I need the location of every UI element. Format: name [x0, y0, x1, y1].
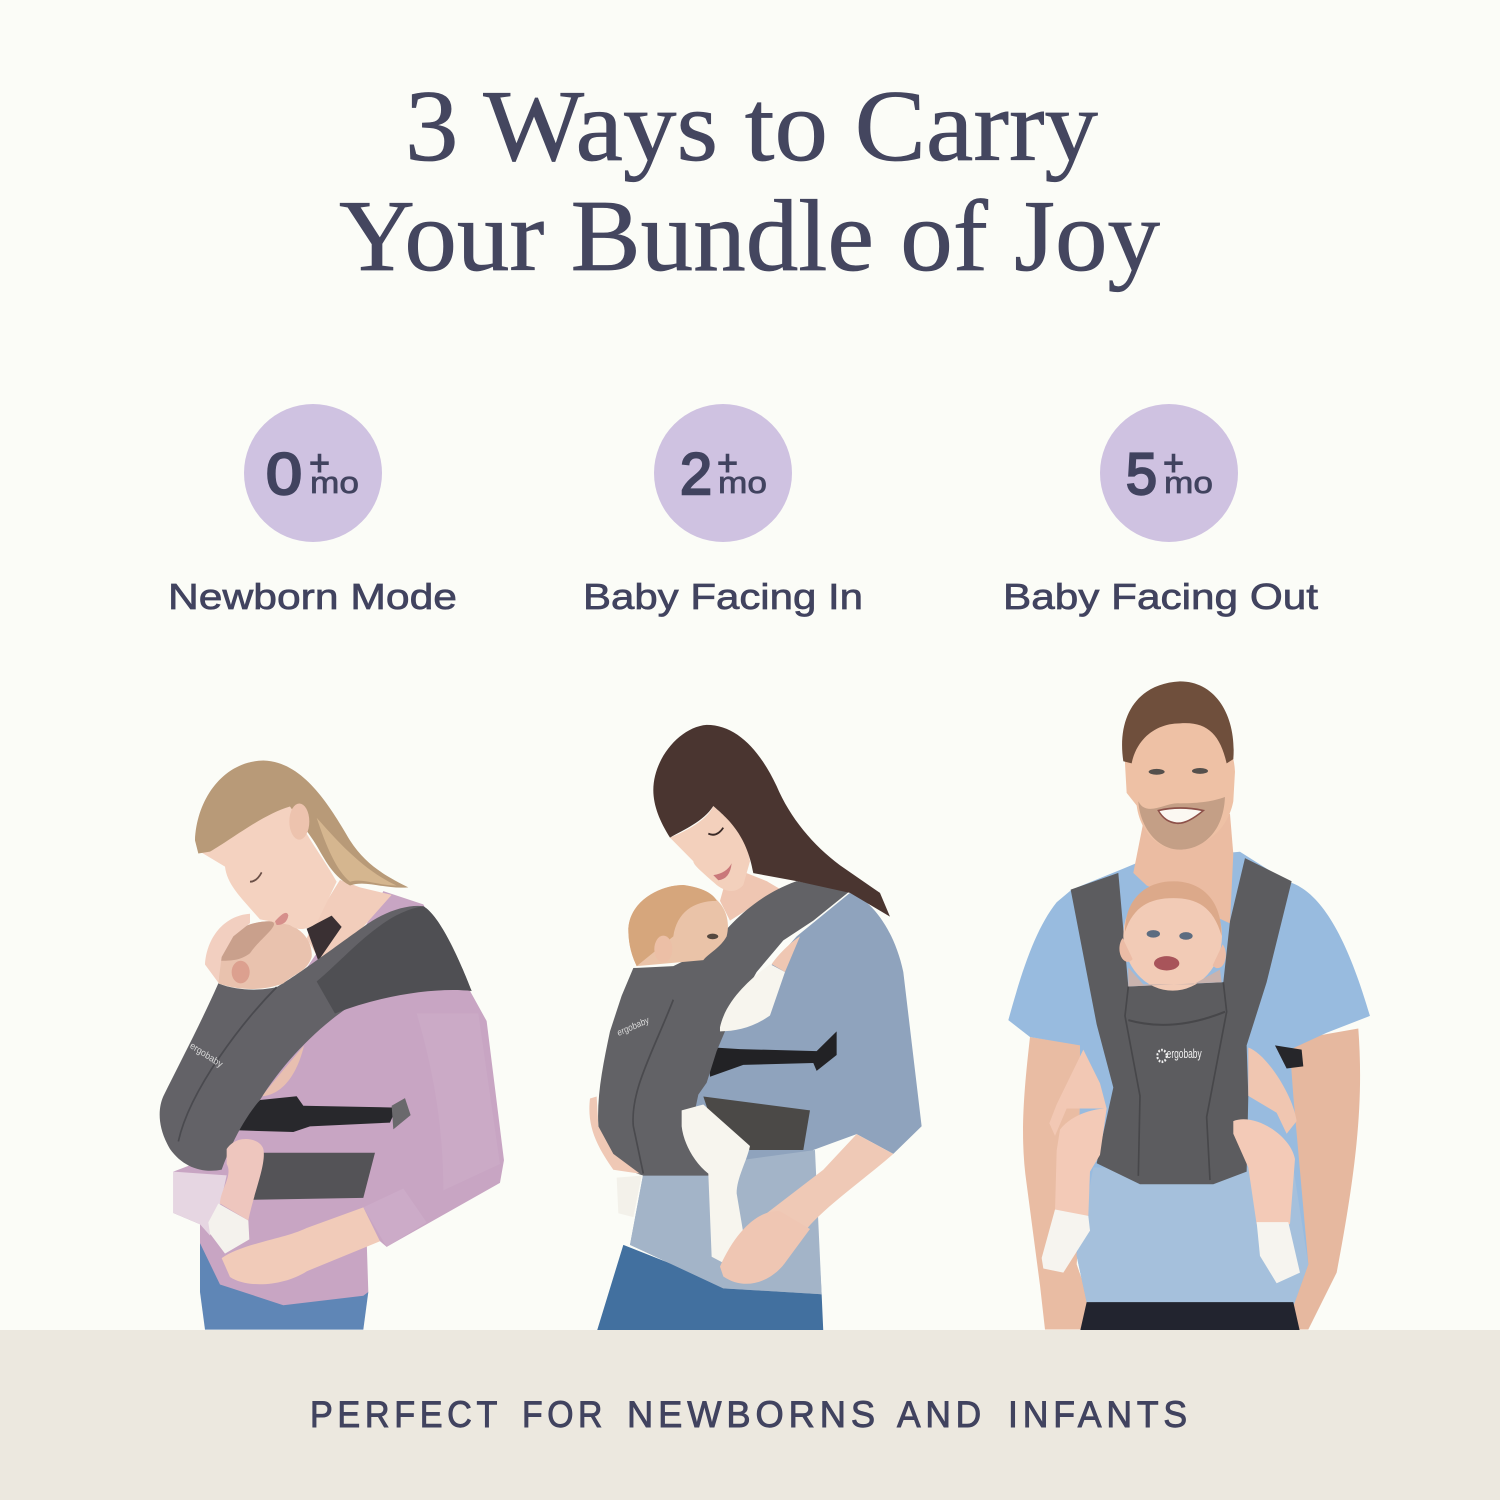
title — [339, 70, 1160, 293]
mother's face — [670, 806, 750, 891]
baby ear — [654, 936, 672, 963]
mother's face — [200, 795, 337, 929]
baby leg — [220, 1139, 264, 1220]
baby hair — [220, 921, 274, 961]
baby arm left — [1049, 1050, 1107, 1136]
logo mark — [1157, 1050, 1167, 1062]
father's hair — [1122, 681, 1234, 763]
mother's lower hand — [222, 1207, 380, 1284]
mother's left hand — [589, 1097, 640, 1174]
carrier — [1071, 858, 1292, 1184]
chest strap — [708, 1031, 837, 1077]
carrier seam — [178, 987, 277, 1141]
label: baby facing out: Baby Facing Out — [1003, 576, 1318, 617]
badge: 0+ months: mo — [310, 465, 359, 500]
jeans — [597, 1245, 823, 1332]
baby ears — [1119, 938, 1226, 968]
baby belly — [262, 1045, 304, 1096]
blue t-shirt — [1008, 852, 1370, 1306]
back strap — [1275, 1045, 1303, 1069]
baby head — [218, 921, 312, 989]
badge: 0+ months: + — [309, 442, 330, 483]
baby far foot — [617, 1176, 642, 1217]
father's left arm — [1023, 1037, 1097, 1329]
neck — [307, 880, 392, 961]
lips — [713, 863, 732, 880]
hair shadow under chin — [307, 916, 342, 961]
footer band: FOR — [522, 1394, 607, 1435]
father's face — [1125, 713, 1235, 850]
neck and chest — [720, 873, 780, 921]
waist belt — [253, 1153, 375, 1200]
baby eye — [707, 934, 718, 939]
baby thigh left — [1055, 1109, 1107, 1216]
strap end pad — [392, 1098, 411, 1129]
mother's hair — [653, 725, 890, 917]
carrier logo: ergobaby — [1167, 1048, 1202, 1061]
footer band — [0, 1330, 1500, 1500]
mother's hair — [195, 761, 408, 888]
baby sock — [208, 1204, 249, 1254]
badge: 2+ months: mo — [718, 465, 767, 500]
baby thigh right — [1233, 1119, 1295, 1224]
baby sock left — [1042, 1210, 1090, 1273]
baby leg — [682, 1104, 750, 1265]
carrier panel and strap — [598, 881, 850, 1176]
mother's ear — [289, 803, 309, 840]
father's right arm — [1283, 1029, 1360, 1329]
title: 3 Ways to Carry — [405, 70, 1098, 183]
baby hair — [1125, 881, 1222, 936]
chest strap — [233, 1096, 397, 1132]
footer band: PERFECT — [310, 1394, 502, 1435]
footer band: INFANTS — [1008, 1394, 1192, 1435]
forearm — [767, 1134, 893, 1229]
baby sock right — [1257, 1222, 1300, 1283]
badge: 0+ months — [244, 404, 382, 542]
title: Your Bundle of Joy — [339, 180, 1160, 293]
badge: 5+ months: mo — [1164, 465, 1213, 500]
eye — [708, 828, 723, 835]
carrier logo: ergobaby — [616, 1014, 651, 1038]
badge: 2+ months: + — [717, 442, 738, 483]
hair highlight — [317, 818, 397, 886]
beard — [1138, 797, 1225, 850]
t-shirt lower section — [1077, 1167, 1308, 1306]
pink sweater — [173, 891, 504, 1305]
label: newborn mode: Newborn Mode — [168, 576, 457, 617]
sweater cuff — [363, 1189, 427, 1247]
figure: mother in newborn mode — [160, 761, 504, 1330]
badge: 5+ months — [1100, 404, 1238, 542]
baby head — [628, 885, 728, 966]
badge: 5+ months: + — [1163, 442, 1184, 483]
footer band: AND — [897, 1394, 986, 1435]
jeans — [1080, 1302, 1300, 1332]
lips — [275, 913, 288, 925]
neck — [1133, 814, 1233, 923]
blue-grey sweater — [630, 893, 922, 1294]
sweater hem — [173, 1172, 227, 1236]
closed eye — [250, 872, 262, 882]
baby eyes — [1147, 930, 1160, 938]
figure: father with baby facing out — [1008, 681, 1370, 1332]
figure: mother with baby facing in — [589, 725, 922, 1332]
carrier panel and strap — [160, 906, 472, 1171]
father's eyes — [1149, 769, 1165, 775]
dark shoulder patch — [317, 906, 472, 1013]
footer band: NEWBORNS — [627, 1394, 880, 1435]
baby hand — [772, 936, 800, 972]
baby head — [1123, 881, 1222, 991]
badge: 2+ months — [654, 404, 792, 542]
baby arm right — [1248, 1047, 1297, 1134]
jeans — [200, 1243, 368, 1330]
carrier seams — [1125, 982, 1227, 1180]
badge: 5+ months: 5 — [1126, 442, 1157, 507]
mother's right hand — [720, 1211, 810, 1284]
badge: 2+ months: 2 — [680, 442, 712, 507]
mouth — [1158, 808, 1203, 823]
baby ear — [232, 961, 250, 983]
sweater arm highlight — [417, 1013, 500, 1190]
label: baby facing in: Baby Facing In — [583, 576, 863, 617]
carrier seam — [633, 1000, 673, 1174]
mother's hand on baby head — [205, 914, 250, 983]
baby arm — [720, 964, 785, 1031]
baby mouth — [1154, 956, 1179, 970]
badge: 0+ months: 0 — [266, 442, 302, 507]
waist belt — [703, 1097, 810, 1150]
carrier logo: ergobaby — [188, 1040, 225, 1070]
sweater lower section — [630, 1150, 822, 1294]
baby hair — [628, 885, 717, 966]
baby collar — [1128, 968, 1222, 986]
